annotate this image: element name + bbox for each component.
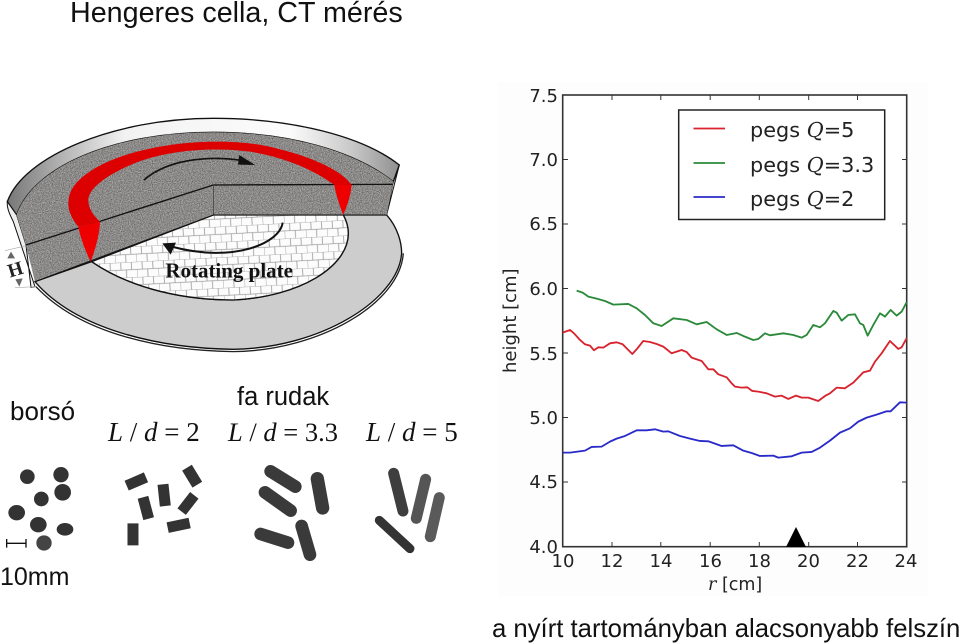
sand top surface bbox=[17, 132, 393, 245]
base plate ring bbox=[35, 215, 402, 349]
marker: black triangle bbox=[786, 527, 806, 547]
x axis ticks: 18 bbox=[748, 551, 771, 572]
label: height H: H bbox=[5, 258, 26, 282]
x axis title: r [cm] bbox=[708, 575, 762, 595]
label: L/d=2: L / d = 2 bbox=[107, 417, 200, 447]
y axis ticks bbox=[529, 86, 558, 558]
left cut face bbox=[26, 185, 213, 282]
arrow: plate rotation bbox=[162, 223, 283, 255]
rods L/d=3.3 bbox=[261, 471, 323, 555]
x axis ticks: 24 bbox=[895, 551, 917, 572]
y axis ticks: 4.5 bbox=[529, 472, 558, 493]
rods L/d=2 bbox=[127, 468, 197, 545]
y axis ticks: 7.5 bbox=[529, 86, 558, 107]
x axis ticks: 20 bbox=[797, 551, 820, 572]
plot frame bbox=[563, 95, 907, 547]
data lines bbox=[563, 291, 907, 458]
label: 10mm: 10mm bbox=[0, 563, 69, 591]
rods L/d=5 bbox=[379, 473, 439, 549]
caption: a nyírt tartományban alacsonyabb felszín bbox=[492, 615, 960, 643]
blue line: Q=2 bbox=[563, 402, 907, 458]
legend: pegs Q=2 bbox=[750, 187, 854, 211]
label: fa rudak: fa rudak bbox=[237, 383, 329, 411]
diagram: rotating plate cell bbox=[5, 118, 403, 352]
y axis ticks: 4.0 bbox=[529, 537, 558, 558]
y axis ticks: 5.0 bbox=[529, 408, 558, 429]
red shear band bbox=[68, 142, 352, 262]
rotating plate tiles bbox=[92, 215, 348, 300]
label: borsó: borsó bbox=[10, 396, 75, 426]
x axis ticks: 12 bbox=[601, 551, 623, 572]
chart bbox=[498, 82, 928, 596]
x axis ticks: 16 bbox=[699, 551, 722, 572]
scale bar bbox=[7, 539, 26, 548]
legend: pegs Q=3.3 bbox=[750, 153, 874, 177]
x axis ticks: 14 bbox=[650, 551, 672, 572]
x axis ticks: 22 bbox=[846, 551, 869, 572]
right cut face bbox=[213, 184, 393, 215]
y axis ticks: 5.5 bbox=[529, 344, 558, 365]
wall rim bbox=[7, 165, 399, 287]
green line: Q=3.3 bbox=[577, 291, 907, 340]
label: rotating plate: Rotating plate bbox=[165, 258, 293, 282]
y axis ticks: 7.0 bbox=[529, 150, 558, 171]
peas bbox=[8, 467, 73, 551]
y axis title: height [cm] bbox=[500, 268, 521, 373]
label: L/d=5: L / d = 5 bbox=[365, 417, 458, 447]
legend bbox=[679, 110, 885, 220]
x axis ticks bbox=[552, 551, 917, 572]
legend: pegs Q=5 bbox=[750, 118, 854, 142]
label: L/d=3.3: L / d = 3.3 bbox=[227, 417, 338, 447]
outer wall bbox=[7, 118, 399, 215]
arrow: sand rotation bbox=[144, 155, 255, 180]
y axis ticks: 6.5 bbox=[529, 214, 558, 235]
label: height H bbox=[5, 246, 35, 288]
x axis ticks: 10 bbox=[552, 551, 574, 572]
y axis ticks: 6.0 bbox=[529, 279, 558, 300]
red line: Q=5 bbox=[563, 330, 907, 401]
